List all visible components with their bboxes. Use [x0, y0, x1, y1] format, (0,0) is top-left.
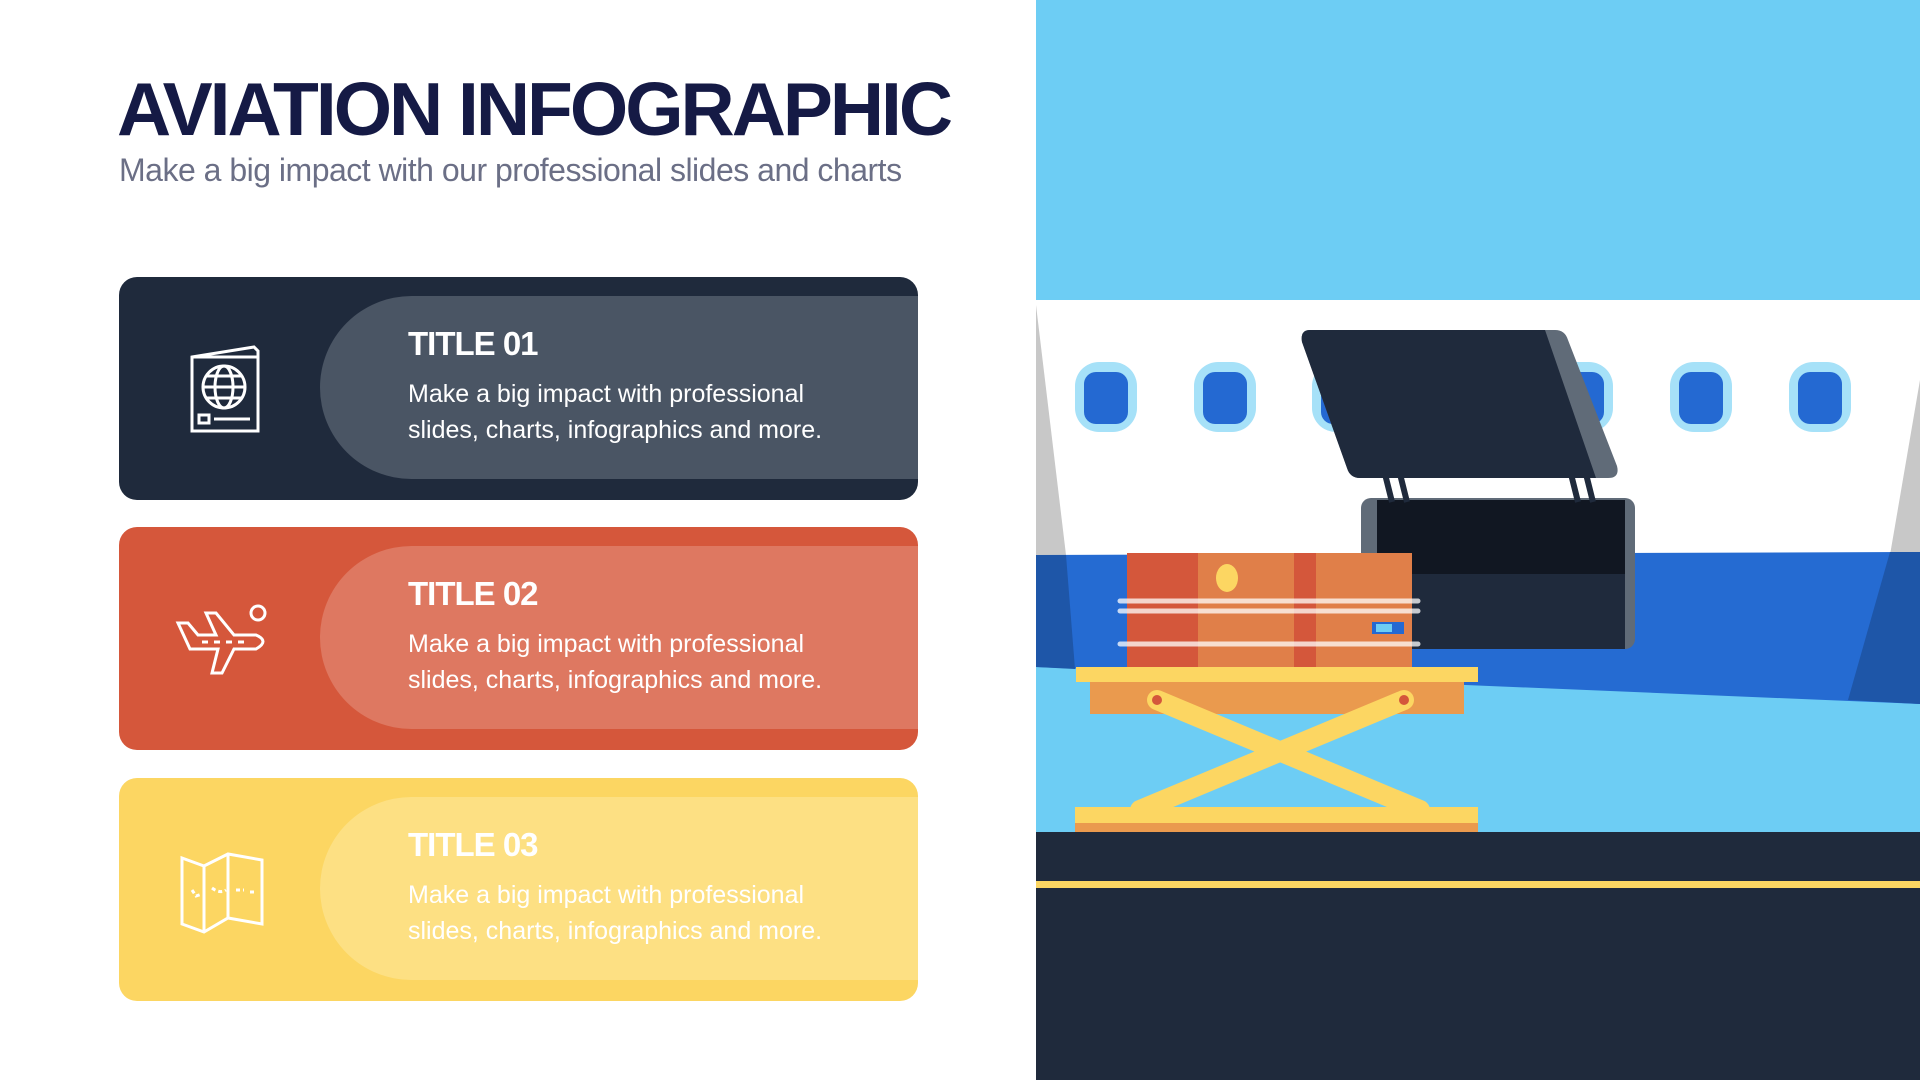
cargo door: [1361, 498, 1635, 649]
card 2: [119, 527, 918, 750]
body 01: Make a big impact with professional: [408, 380, 804, 408]
pill 1: [320, 296, 918, 479]
body 01: [408, 380, 822, 444]
card 1: [119, 277, 918, 500]
body 03: [408, 881, 822, 945]
illustration: cargo loading: [1036, 0, 1920, 1080]
tarmac: [1036, 832, 1920, 1080]
pill 2: [320, 546, 918, 729]
title 03: TITLE 03: [408, 826, 538, 863]
windows: [1075, 362, 1851, 432]
body 02: slides, charts, infographics and more.: [408, 666, 822, 694]
fuselage: [1036, 300, 1920, 555]
icon: passport: [190, 345, 260, 432]
body 03: slides, charts, infographics and more.: [408, 917, 822, 945]
icon: map: [180, 852, 264, 934]
title 01: TITLE 01: [408, 325, 538, 362]
title 02: TITLE 02: [408, 575, 538, 612]
body 01: slides, charts, infographics and more.: [408, 416, 822, 444]
cargo box: [1127, 553, 1412, 667]
subtitle: Make a big impact with our professional slides and charts: [119, 152, 902, 188]
card 3: [119, 778, 918, 1001]
body 02: Make a big impact with professional: [408, 630, 804, 658]
icon: airplane: [176, 604, 266, 674]
body 03: Make a big impact with professional: [408, 881, 804, 909]
title: AVIATION INFOGRAPHIC: [117, 67, 950, 151]
pill 3: [320, 797, 918, 980]
body 02: [408, 630, 822, 694]
lift table: [1090, 682, 1464, 714]
